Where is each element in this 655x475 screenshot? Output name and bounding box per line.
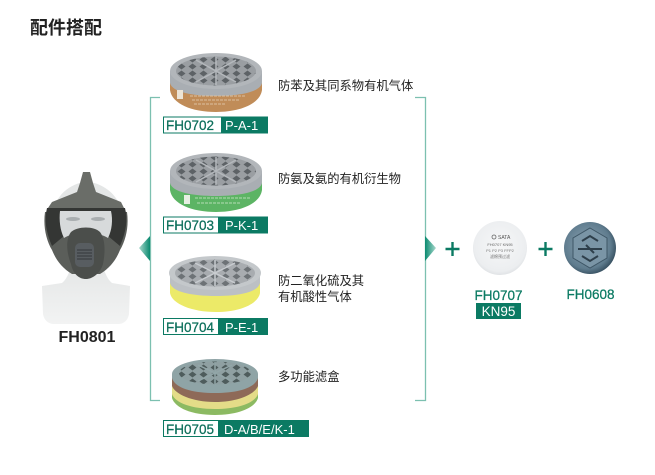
badge: FH0702 P-A-1: FH0702	[166, 118, 214, 133]
description: multifunction: 多功能滤盒	[278, 369, 340, 384]
badge: FH0704 P-E-1	[164, 318, 268, 335]
icon: connector cap FH0608	[564, 222, 616, 274]
nose cup	[67, 228, 105, 279]
badge: FH0705 D-A/B/E/K-1: D-A/B/E/K-1	[224, 422, 295, 437]
icon: filter disc FH0707: P1 P2 P3 FFP2	[486, 248, 515, 253]
visor face	[60, 211, 112, 238]
cartridge: FH0704	[169, 256, 261, 312]
badge: KN95: KN95	[482, 304, 515, 319]
title: 配件搭配	[30, 18, 102, 38]
badge: FH0702 P-A-1	[164, 117, 268, 134]
badge: FH0703 P-K-1	[164, 217, 268, 234]
badge: FH0705 D-A/B/E/K-1	[164, 420, 309, 437]
icon: full-face mask FH0801	[42, 172, 130, 324]
cartridge: FH0705	[172, 359, 258, 415]
clear helmet dome	[55, 182, 120, 205]
description: ammonia: 防氨及氨的有机衍生物	[278, 171, 401, 186]
icon: plus 1	[446, 242, 460, 256]
filter mount	[75, 243, 94, 267]
badge: FH0705 D-A/B/E/K-1: FH0705	[166, 422, 214, 437]
icon: filter disc FH0707: 滤棉预过滤	[490, 253, 510, 259]
right bracket	[415, 98, 436, 400]
mannequin bust	[42, 262, 130, 324]
visor dark edge	[46, 208, 126, 246]
mask lower seal	[44, 212, 128, 274]
icon: filter disc FH0707	[473, 221, 527, 275]
description: sulfur dioxide: 防二氧化硫及其	[278, 273, 364, 288]
label: FH0707: FH0707	[474, 288, 523, 303]
badge: FH0703 P-K-1: P-K-1	[225, 218, 258, 233]
cartridge: FH0703	[170, 153, 262, 212]
badge: FH0704 P-E-1: P-E-1	[225, 320, 258, 335]
badge: FH0702 P-A-1: P-A-1	[225, 118, 258, 133]
icon: filter disc FH0707: SATA	[498, 235, 511, 241]
badge: FH0703 P-K-1: FH0703	[166, 218, 214, 233]
description: benzene: 防苯及其同系物有机气体	[278, 78, 413, 93]
label: FH0801: FH0801	[59, 329, 116, 346]
cartridge: FH0702	[170, 53, 262, 112]
description: sulfur dioxide	[278, 273, 364, 304]
label: FH0608: FH0608	[566, 287, 615, 302]
description: sulfur dioxide: 有机酸性气体	[278, 289, 352, 304]
icon: plus 2	[538, 242, 552, 256]
icon: filter disc FH0707: FH0707 KN95	[487, 242, 513, 247]
top strap and band	[48, 172, 124, 208]
left bracket	[139, 98, 160, 400]
badge: FH0704 P-E-1: FH0704	[166, 320, 215, 335]
